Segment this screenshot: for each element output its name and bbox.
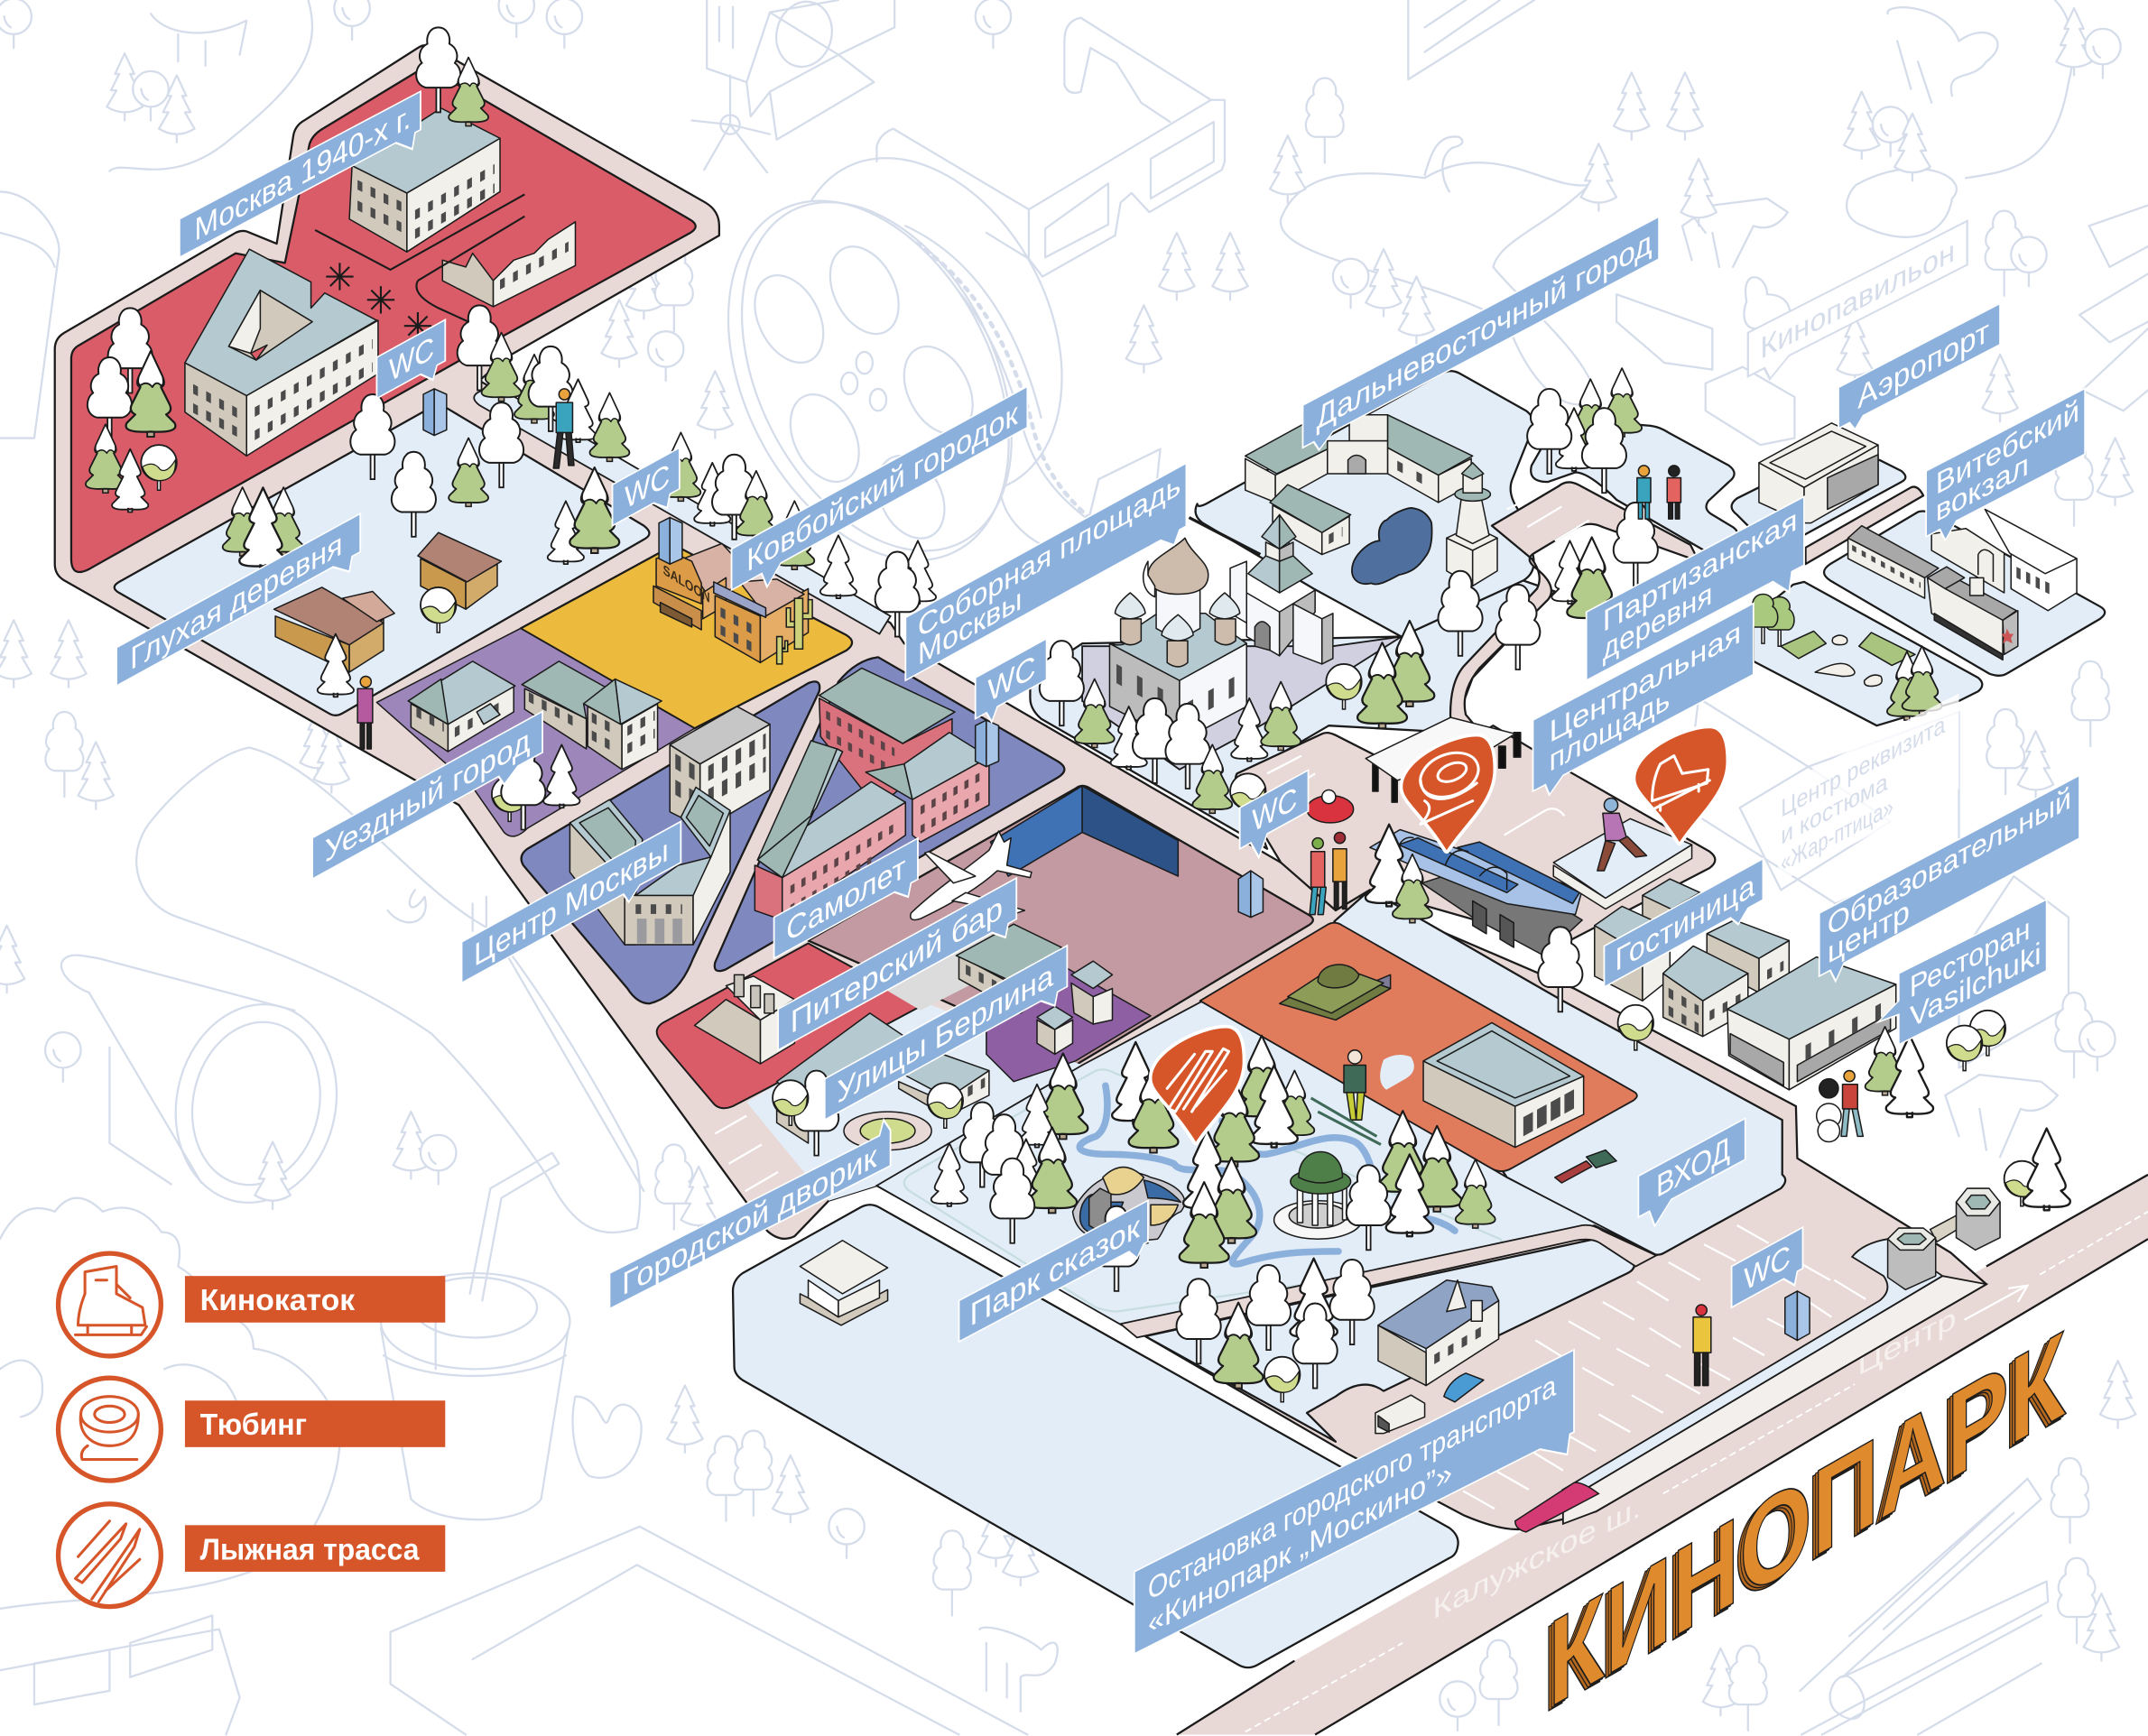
second fox [1945, 1075, 2058, 1157]
sheep [151, 7, 1997, 103]
building: cowboy store [714, 579, 809, 662]
frozen pond [1352, 508, 1432, 585]
label: Vitebsk station: вокзал [1936, 447, 2029, 529]
airplane [911, 831, 1032, 920]
building: Moscow main [349, 108, 500, 252]
building: pink long house [755, 741, 905, 920]
zone: path above the road [474, 386, 891, 634]
building: brown cabin [418, 532, 502, 609]
label: far eastern town: Дальневосточный город [1317, 223, 1653, 436]
building: Berlin long house [777, 1013, 921, 1143]
building: temple on lower field [800, 1241, 888, 1325]
label: central square [1532, 604, 1754, 804]
lane strip on lower lawn [1121, 1225, 1656, 1337]
label: WC central [1240, 771, 1309, 868]
label: central square: площадь [1550, 681, 1670, 779]
rabbit [1744, 277, 1790, 328]
zone: Vitebsk station [1824, 511, 2105, 676]
pin: ski track [1153, 1029, 1243, 1141]
zone: red film street [657, 943, 921, 1108]
building: Moscow ruin [442, 222, 576, 307]
museum hall [1423, 1022, 1584, 1148]
dino neck [1425, 136, 1462, 191]
trees [86, 27, 2070, 1402]
legend: ice rink: Кинокаток [200, 1284, 355, 1317]
legend: ice rink [59, 1253, 445, 1356]
building: L-shaped block [185, 249, 378, 456]
zone: partisan village [1754, 582, 1982, 725]
label: WC Moscow: WC [389, 328, 434, 389]
label: Vasilchuki restaurant [1878, 900, 2047, 1055]
label: city courtyard: Городской дворик [622, 1137, 877, 1303]
pavilion canopy [1366, 717, 1521, 802]
zone: ice yard [1531, 419, 1737, 550]
fountain square [844, 1112, 931, 1150]
station building [1931, 509, 2077, 611]
label: partisan village: деревня [1603, 576, 1712, 668]
zone: grey strip [854, 915, 1027, 1011]
river and hills top right [1281, 0, 2073, 404]
square road marks [1267, 493, 1589, 836]
label: cathedral square: Соборная площадь [918, 466, 1180, 645]
zone: remote village [115, 406, 649, 716]
zone: central Moscow [522, 681, 819, 1003]
lighthouse tower [1447, 463, 1497, 586]
gate connector [1930, 1209, 1968, 1242]
label: bus stop [1134, 1350, 1574, 1673]
large bushes and bench [0, 1198, 340, 1734]
road name: Kaluga highway: Калужское ш. [1433, 1490, 1641, 1627]
label: central square: Центральная [1550, 614, 1741, 750]
cacti [777, 598, 812, 664]
zone: far eastern town [1196, 371, 1534, 637]
large ticket outline [391, 1527, 1027, 1734]
person: snow angel [1555, 1150, 1616, 1183]
tank [1280, 965, 1391, 1020]
icon: skate [1651, 756, 1709, 810]
people: tubing group [1307, 790, 1354, 915]
building: village house [274, 587, 394, 672]
megaphone [61, 956, 355, 1218]
label: WC walk: WC [625, 456, 670, 516]
people: snowman and child [1817, 1071, 1863, 1141]
building: far eastern house [1270, 485, 1351, 555]
label: WC parking [1732, 1227, 1803, 1320]
label: Vasilchuki restaurant: Ресторан [1910, 910, 2030, 1005]
gate left [1888, 1228, 1936, 1289]
deer [979, 1628, 1058, 1712]
icon: skis [75, 1521, 140, 1602]
building: far eastern main [1245, 415, 1473, 503]
fairy-tale pond [1072, 1168, 1185, 1243]
label: bus stop: «Кинопарк „Москино”» [1148, 1454, 1452, 1641]
zone: military orange [1200, 923, 1637, 1171]
label: bus stop: Остановка городского транспорта [1148, 1367, 1557, 1607]
airport [1759, 423, 1878, 523]
building: county house two [522, 661, 662, 770]
snow markers [326, 263, 431, 339]
label: Vitebsk station: Витебский [1936, 392, 2079, 502]
WC boxes [423, 389, 1810, 1340]
label: county town: Уездный город [325, 721, 531, 869]
zone: purple strip [986, 965, 1151, 1082]
title: KINOPARK: КИНОПАРК [1545, 1306, 2063, 1736]
fox [1682, 199, 1788, 267]
clapperboard [1800, 1479, 2048, 1734]
zone: Moscow 1940s [71, 69, 696, 572]
drink cup [381, 1153, 569, 1519]
zone: road-side lawn [1334, 890, 1785, 1255]
label: remote village: Глухая деревня [130, 525, 342, 677]
small snow patch [1380, 1055, 1414, 1090]
building: pink house front [866, 733, 989, 842]
building: county house one [408, 661, 515, 752]
cathedral [1109, 538, 1246, 742]
label: WC cathedral [976, 639, 1047, 731]
Kaluga highway [1177, 1175, 2148, 1734]
label: education centre: центр [1828, 893, 1910, 970]
church tower [1230, 515, 1333, 664]
label: WC parking: WC [1744, 1237, 1791, 1297]
zone: lower lawn [1145, 1239, 1634, 1442]
person: skater [1597, 799, 1646, 871]
legend: ski track: Лыжная трасса [200, 1533, 420, 1566]
park faint track [904, 1069, 1504, 1312]
legend: ski track [59, 1504, 445, 1607]
person: pink coat [357, 677, 373, 749]
icon: skate [75, 1267, 146, 1334]
zone: airport lawn [1732, 460, 1905, 549]
label: entrance [1638, 1118, 1745, 1235]
villa [1378, 1280, 1499, 1386]
label: WC walk [612, 448, 680, 538]
zone: cathedral lawn [1030, 577, 1555, 849]
bus stop marker [1515, 1482, 1598, 1532]
top left cup [0, 191, 59, 439]
label: central Moscow: Центр Москвы [474, 831, 669, 974]
building: saloon [653, 543, 751, 630]
zone: cathedral square [1082, 637, 1402, 770]
gate right [1957, 1188, 2000, 1250]
zone: lower field [733, 1205, 1458, 1667]
pin: tubing [1403, 736, 1493, 850]
hotel buildings [1595, 879, 1789, 1037]
label: airplane: Самолет [786, 848, 905, 948]
gazebo [1274, 1151, 1362, 1239]
building: central Moscow block [569, 787, 730, 945]
ice route in park [1079, 1085, 1455, 1264]
person: walker [553, 389, 574, 468]
light sidewalk by highway [1563, 1276, 1986, 1524]
building: small towers [1037, 961, 1112, 1054]
gate lawn and strip [1563, 1239, 1942, 1495]
building: grey city block [670, 706, 770, 826]
train [1848, 526, 2018, 660]
label: Vasilchuki restaurant: Vasilchuki [1910, 936, 2042, 1035]
building: pink house top [819, 668, 955, 808]
film reel [671, 113, 1161, 607]
zone: courtyard lawn [746, 1001, 1082, 1201]
label: entrance: ВХОД [1656, 1130, 1730, 1205]
legend [59, 1253, 445, 1607]
road: to station [1806, 487, 1923, 564]
label: Petersburg bar: Питерский бар [791, 889, 1003, 1040]
label: cathedral square: Москвы [918, 581, 1022, 672]
icon: skis [1167, 1048, 1229, 1112]
text: saloon sign: SALOON [663, 562, 710, 606]
bus and car [1375, 1373, 1484, 1434]
path: curved walkway [1450, 482, 1699, 739]
legend: tubing: Тюбинг [200, 1408, 307, 1442]
label: airport [1838, 303, 2000, 439]
label: education centre: Образовательный [1828, 780, 2071, 943]
notice board top [1408, 0, 1534, 79]
title: KINOPARK: КИНОПАРК [1542, 1308, 2060, 1736]
education centre [1727, 957, 1896, 1090]
bobsled structure [1370, 830, 1582, 956]
road name: centre: Центр [1857, 1301, 1957, 1382]
zone: Petersburg blue block [715, 657, 1064, 971]
zone: plane field [809, 786, 1313, 1065]
label: fairy-tale park: Парк сказок [970, 1207, 1140, 1333]
label: partisan village [1587, 496, 1804, 699]
building: Berlin house two [899, 1054, 989, 1116]
label: Moscow 1940s: Москва 1940-х г. [195, 97, 411, 248]
label: airport: Аэропорт [1857, 312, 1989, 416]
parking lines [1463, 1225, 1866, 1509]
road stub beside far eastern town [1190, 518, 1260, 555]
zone: fairytale park [876, 1000, 1658, 1325]
park base road network [55, 45, 1986, 1529]
zone: white wedge behind church [1314, 588, 1362, 637]
streets in Moscow zone [315, 194, 524, 328]
label: film props centre [1778, 693, 1959, 883]
label: Berlin streets: Улицы Берлина [837, 956, 1053, 1111]
river and hills left [109, 0, 643, 1233]
legend: tubing [59, 1378, 445, 1481]
label: hotel: Гостиница [1616, 866, 1755, 978]
3D glasses [876, 18, 1225, 277]
film set blue wall [990, 786, 1178, 876]
label: Vitebsk station [1926, 388, 2085, 550]
label: partisan village: Партизанская [1603, 502, 1797, 639]
title: KINOPARK: КИНОПАРК [1548, 1303, 2066, 1735]
direction arrow [1965, 1286, 2027, 1320]
pin: ice skate [1635, 728, 1726, 842]
zone: city courtyard road marks [715, 1116, 778, 1191]
stacked cubes right [2079, 206, 2148, 411]
label: film props centre: и костюма [1781, 768, 1888, 851]
label: WC Moscow [376, 319, 445, 411]
squirrel [573, 1397, 642, 1478]
people: ice yard pair [1637, 466, 1680, 519]
zone: cowboy town [521, 545, 852, 728]
tents and rocks [1781, 631, 1915, 686]
label: cowboy town: Ковбойский городок [746, 394, 1018, 579]
icon: tube [80, 1397, 138, 1459]
pale studio buildings [1616, 294, 2069, 1068]
zone: central square [1236, 725, 1715, 945]
zone: county town [376, 628, 695, 836]
icon: tube [1413, 744, 1485, 824]
film projector [692, 0, 894, 172]
label: film pavilion: Кинопавильон [1760, 233, 1955, 366]
label: film props centre: «Жар-птица» [1781, 792, 1893, 878]
person: skier [1311, 1050, 1381, 1145]
label: WC central: WC [1252, 779, 1297, 839]
skating rink [1553, 818, 1692, 910]
label: film props centre: Центр реквизита [1781, 710, 1946, 823]
swan and reeds [388, 890, 486, 931]
building: bar house [956, 924, 1061, 1013]
person: yellow coat [1693, 1305, 1711, 1386]
building: factory [695, 974, 794, 1064]
label: WC cathedral: WC [987, 648, 1036, 709]
